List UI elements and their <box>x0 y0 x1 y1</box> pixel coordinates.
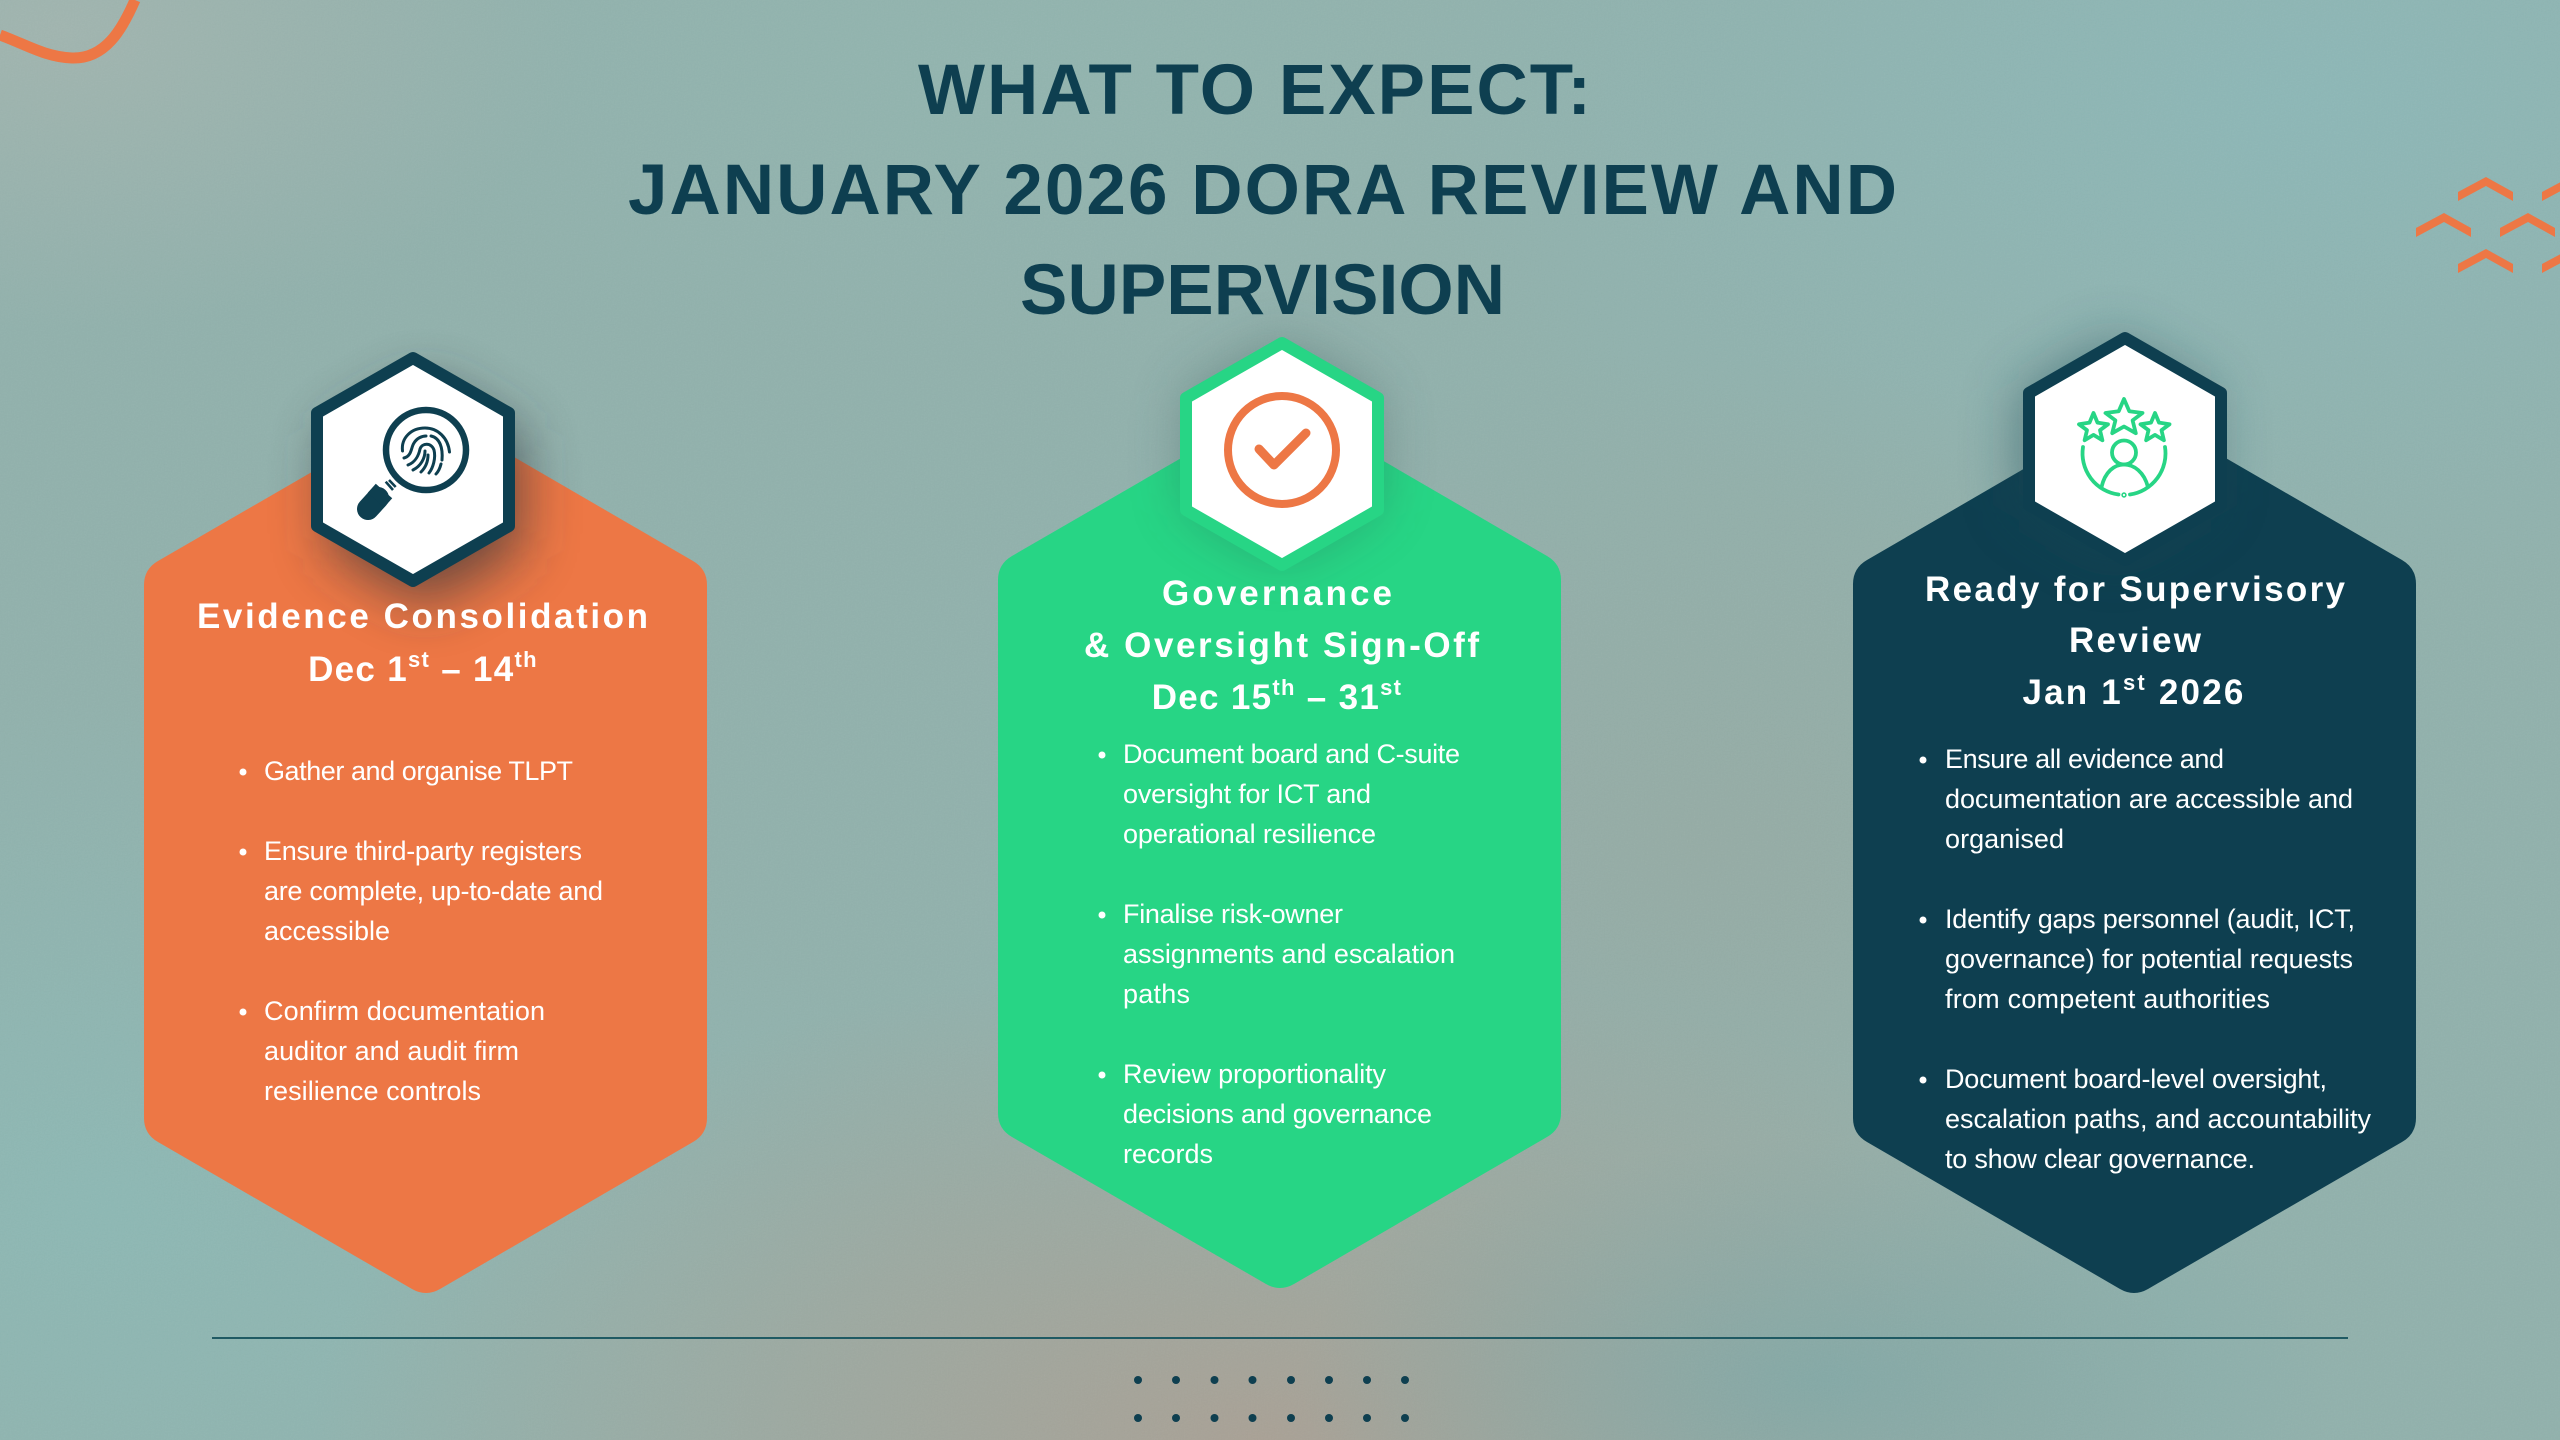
icon badge: check mark <box>1186 343 1378 565</box>
heading: Jan 1 <box>2022 673 2123 712</box>
bullet list: are complete, up-to-date and <box>264 876 603 906</box>
heading: Governance <box>1162 574 1392 613</box>
navy hexagon background <box>1853 409 2416 1293</box>
bullet list: Identify gaps personnel (audit, ICT, <box>1945 904 2355 934</box>
heading: Ready for Supervisory <box>1925 570 2346 609</box>
heading <box>197 597 648 689</box>
bullet list <box>1098 739 1460 1169</box>
heading: – 31 <box>1296 678 1380 717</box>
bullet list: auditor and audit firm <box>264 1036 519 1066</box>
heading: Dec 1 <box>308 650 408 689</box>
bullet list: assignments and escalation <box>1123 939 1455 969</box>
bullet list: Confirm documentation <box>264 996 545 1026</box>
bullet list: oversight for ICT and <box>1123 779 1371 809</box>
bullet list: records <box>1123 1139 1213 1169</box>
panel: ready for supervisory review <box>1853 338 2416 1293</box>
bullet list: organised <box>1945 824 2064 854</box>
bullet list <box>1920 744 2372 1174</box>
title: JANUARY 2026 DORA REVIEW AND <box>628 151 1897 230</box>
heading: th <box>1272 675 1296 700</box>
bullet list: operational resilience <box>1123 819 1376 849</box>
bullet list: governance) for potential requests <box>1945 944 2353 974</box>
bullet list: documentation are accessible and <box>1945 784 2353 814</box>
icon shadow <box>2019 338 2211 560</box>
decorative orange curve top left <box>0 0 135 58</box>
heading <box>1925 570 2346 712</box>
heading: st <box>408 647 430 672</box>
bullet list: from competent authorities <box>1945 984 2270 1014</box>
bullet list: to show clear governance. <box>1945 1144 2255 1174</box>
bullet list: Document board-level oversight, <box>1945 1064 2327 1094</box>
panel: evidence consolidation <box>144 358 707 1293</box>
icon badge: stars and person <box>2029 338 2221 560</box>
decorative orange chevrons top right <box>2416 177 2560 273</box>
icon shadow <box>329 382 521 605</box>
green hexagon background <box>998 405 1561 1288</box>
panel: governance and oversight sign-off <box>998 340 1561 1288</box>
heading: Review <box>2069 621 2202 660</box>
heading: st <box>1380 675 1402 700</box>
bullet list: resilience controls <box>264 1076 481 1106</box>
bullet list: Review proportionality <box>1123 1059 1386 1089</box>
bullet list: accessible <box>264 916 390 946</box>
orange hexagon background <box>144 410 707 1293</box>
heading: th <box>515 647 538 672</box>
heading: st <box>2123 670 2147 695</box>
bullet list: Ensure all evidence and <box>1945 744 2224 774</box>
bullet list: Document board and C-suite <box>1123 739 1460 769</box>
heading: 2026 <box>2147 673 2246 712</box>
bullet list: decisions and governance <box>1123 1099 1432 1129</box>
bullet list: paths <box>1123 979 1190 1009</box>
bullet list <box>240 756 603 1106</box>
title <box>628 51 1897 330</box>
bullet list: escalation paths, and accountability <box>1945 1104 2372 1134</box>
heading: – 14 <box>430 650 515 689</box>
bullet list: Ensure third-party registers <box>264 836 582 866</box>
icon shadow <box>1186 340 1378 562</box>
icon badge: fingerprint magnifier <box>317 358 509 581</box>
title: WHAT TO EXPECT: <box>918 51 1591 130</box>
footer divider line <box>212 1337 2348 1339</box>
decorative dot grid <box>1134 1376 1409 1422</box>
title: SUPERVISION <box>1020 251 1505 330</box>
bullet list: Gather and organise TLPT <box>264 756 573 786</box>
heading: Dec 15 <box>1152 678 1272 717</box>
bullet list: Finalise risk-owner <box>1123 899 1343 929</box>
heading: & Oversight Sign-Off <box>1084 626 1479 665</box>
heading <box>1084 574 1479 717</box>
heading: Evidence Consolidation <box>197 597 648 636</box>
